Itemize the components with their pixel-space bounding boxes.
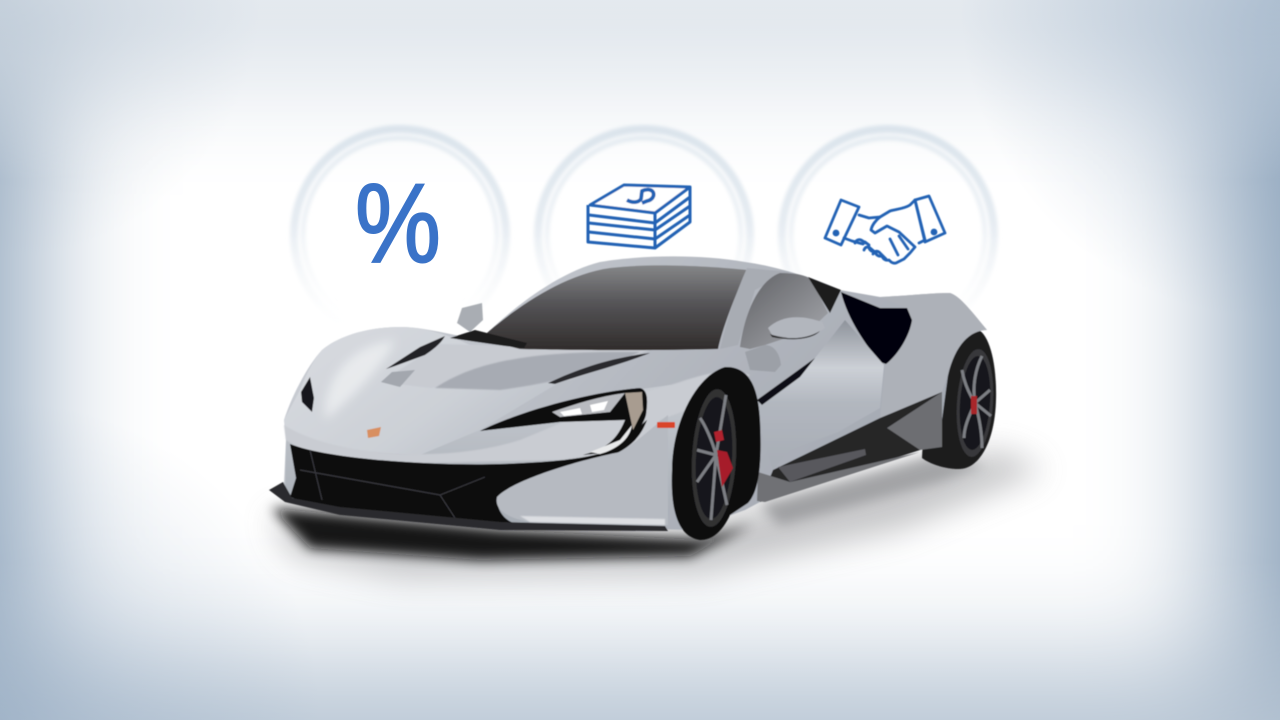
- car: badge: [367, 427, 381, 438]
- car: hood highlight: [325, 340, 395, 420]
- car: lower bumper panel: [497, 415, 668, 525]
- car: front splitter: [269, 482, 668, 531]
- car: door: [757, 320, 884, 470]
- car: side mirror: [745, 317, 825, 372]
- ring: percent: [294, 129, 506, 341]
- car: side window: [740, 273, 828, 349]
- panel: handshake circle: [782, 129, 994, 341]
- panel: percent circle: [294, 129, 506, 341]
- car: main silhouette: [269, 256, 987, 530]
- car: front grille: [290, 420, 647, 525]
- car: front nose panel: [285, 385, 692, 525]
- car: upper front fender: [284, 372, 750, 463]
- illustration: sports car: [269, 256, 997, 540]
- car: side marker: [657, 422, 675, 428]
- car: headlight: [480, 388, 647, 455]
- car: hood: [284, 327, 640, 455]
- car: hood scoop: [381, 336, 650, 390]
- car: left headlight: [301, 377, 314, 412]
- icon: stack of banknotes: [588, 185, 690, 248]
- icon: percent sign: %: [355, 161, 441, 287]
- car: wiper and mirror: [450, 303, 527, 348]
- ring: cash: [538, 129, 750, 341]
- car: side skirt: [757, 392, 942, 502]
- ground shadow: [270, 450, 1045, 578]
- car: a-pillar and roof: [720, 268, 790, 349]
- panel: cash circle: [538, 129, 750, 341]
- car: front wheel: [672, 367, 761, 540]
- ring: handshake: [782, 129, 994, 341]
- car: rear quarter: [880, 293, 987, 420]
- icon: handshake: [825, 196, 945, 263]
- car: rear side intake: [841, 292, 912, 364]
- car: windshield: [480, 265, 747, 350]
- car: rear wheel: [922, 328, 997, 469]
